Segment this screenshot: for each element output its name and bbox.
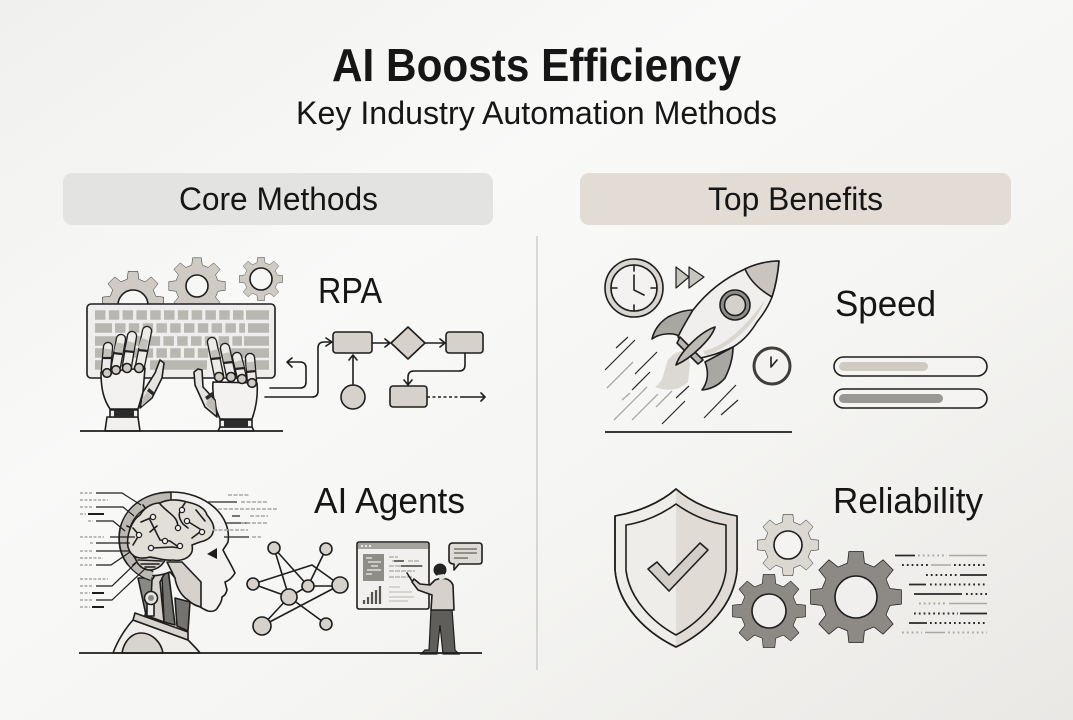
icon: shield with check — [615, 489, 737, 647]
progress bar 1 — [834, 357, 987, 376]
icon: left robot hand — [101, 331, 164, 431]
icon: gears — [732, 514, 901, 648]
callout lines: right — [208, 495, 277, 537]
panel header: Top Benefits — [580, 173, 1011, 225]
icon: fast forward — [676, 267, 704, 288]
label: Speed: Speed — [835, 283, 936, 324]
flowchart — [265, 327, 485, 409]
label: RPA: RPA — [318, 270, 382, 311]
panel header: Core Methods — [63, 173, 493, 225]
dashboard screen — [357, 542, 429, 609]
icon: small clock — [754, 348, 790, 384]
panel header: Core Methods: Core Methods — [179, 181, 378, 217]
icon: gears above keyboard — [102, 257, 283, 333]
panel: Speed — [605, 259, 987, 432]
icon: speed lines — [605, 337, 738, 424]
label: AI Agents: AI Agents — [314, 480, 465, 521]
panel: AI Agents — [79, 480, 482, 654]
presenter figure — [407, 543, 482, 654]
icon: wall clock — [605, 259, 663, 317]
network diagram — [247, 542, 348, 635]
icon: rocket — [652, 261, 779, 390]
icon: AI head with brain — [113, 492, 235, 653]
panel header: Top Benefits: Top Benefits — [708, 181, 883, 217]
panel: Reliability — [615, 480, 987, 648]
title: AI Boosts Efficiency — [332, 39, 741, 91]
callout lines: left — [80, 493, 146, 607]
progress bar 2 — [834, 389, 987, 408]
icon: right robot hand — [194, 342, 257, 431]
label: Reliability: Reliability — [833, 480, 983, 521]
icon: keyboard — [87, 304, 275, 378]
subtitle: Key Industry Automation Methods — [296, 95, 777, 131]
data stream lines — [895, 556, 987, 632]
panel: RPA — [80, 257, 485, 431]
